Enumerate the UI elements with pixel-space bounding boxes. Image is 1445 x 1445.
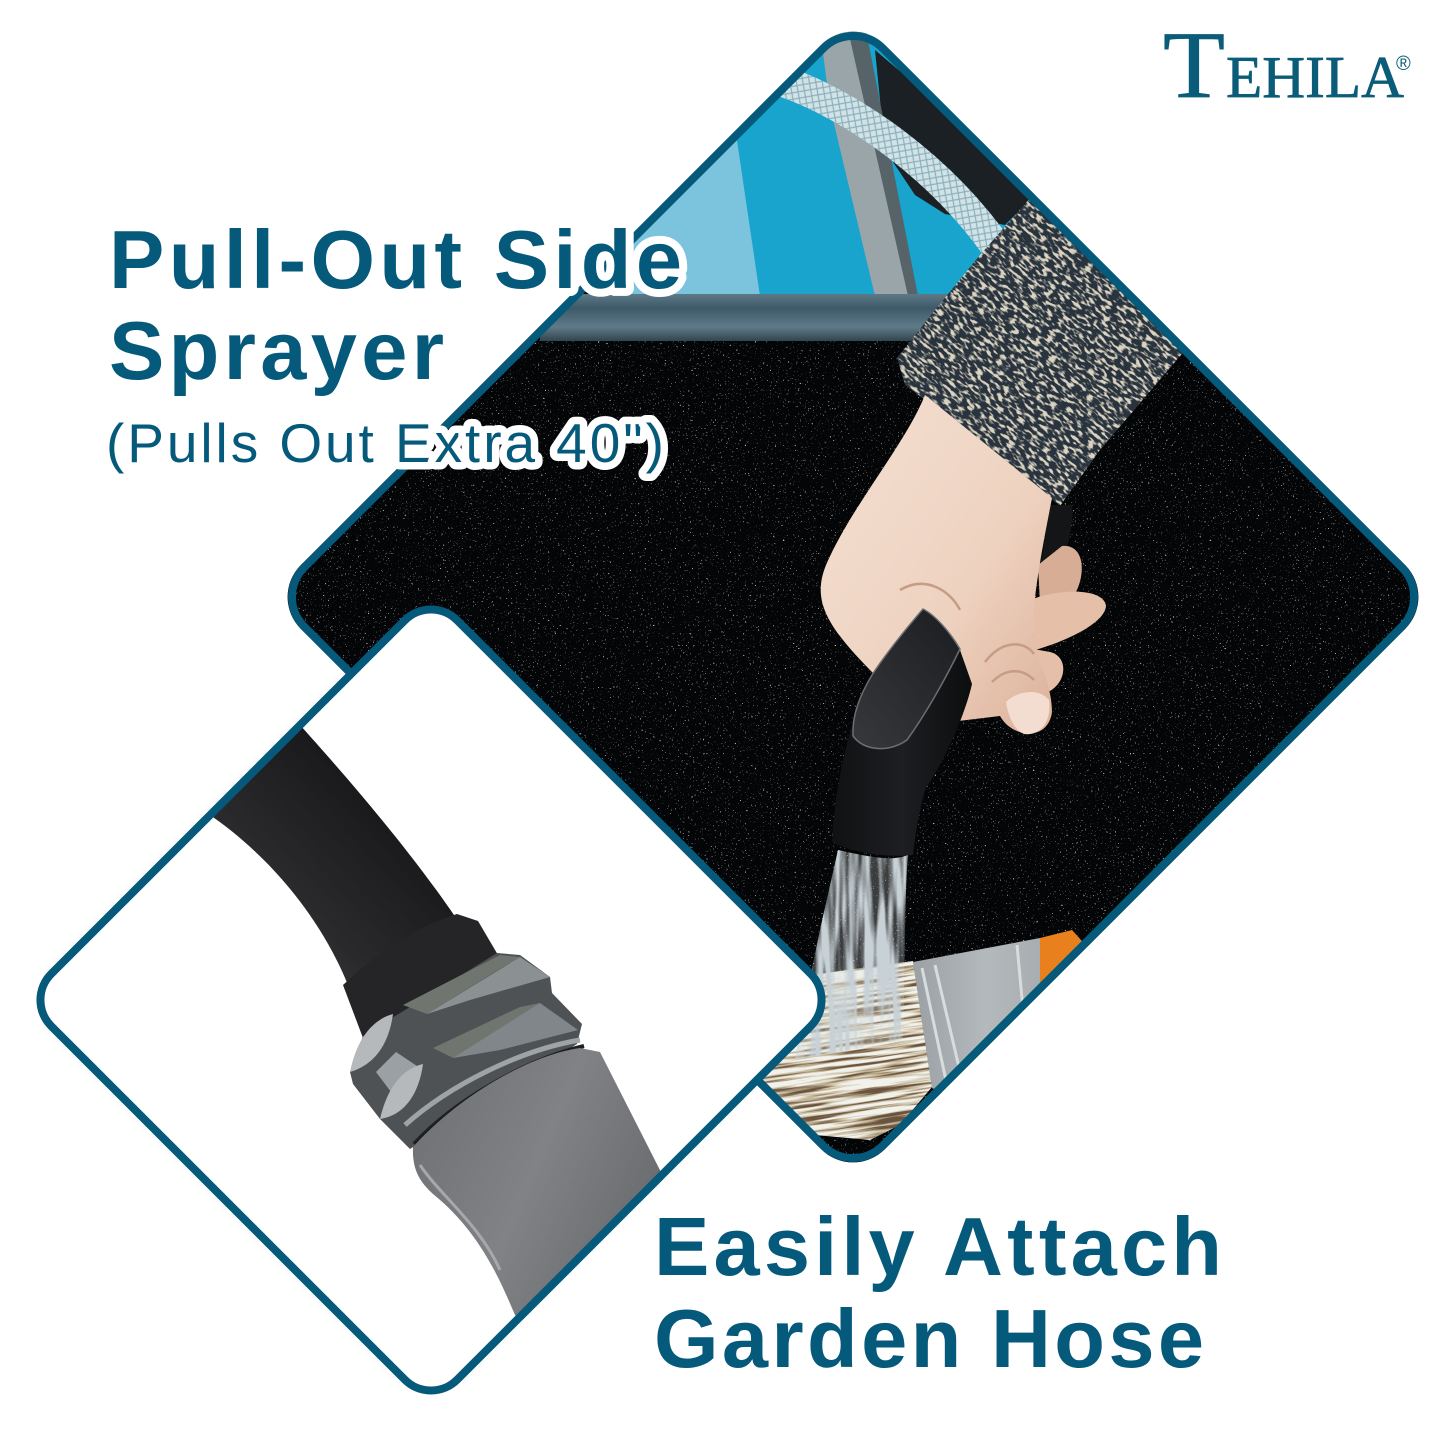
heading: pull-out side sprayer: Pull-Out Side <box>109 213 682 306</box>
hex facet lower <box>380 1064 423 1119</box>
silver ring <box>405 1040 580 1125</box>
sprayer handle panel <box>853 609 960 749</box>
lower nut facet <box>433 1003 540 1058</box>
subheading: pulls out extra 40 inches: (Pulls Out Extra 40") <box>106 412 664 474</box>
braided hose <box>785 82 1000 252</box>
dark patterned panel <box>875 50 1040 225</box>
paint brush bristles <box>762 961 932 1140</box>
thumb nail <box>1006 692 1049 734</box>
fingers <box>1028 546 1106 694</box>
panel: sprayer photo diamond <box>260 19 1440 1187</box>
upper nut facet <box>403 955 520 1014</box>
ferrule ridges <box>922 945 1024 1090</box>
brush ferrule <box>913 938 1060 1100</box>
logo: Tehila <box>1163 12 1411 118</box>
hand <box>821 395 1052 734</box>
sprayer diamond border <box>275 19 1431 1175</box>
hose diamond border <box>25 594 837 1406</box>
black hose <box>210 725 456 990</box>
adapter highlight <box>420 1165 500 1270</box>
black collar <box>343 914 498 1038</box>
sink ledge <box>540 294 960 341</box>
logo: Tehila: ® <box>1396 53 1411 75</box>
black gasket <box>414 1046 584 1144</box>
grey vertical post <box>820 30 912 296</box>
heading: easily attach garden hose: Garden Hose <box>654 1292 1204 1385</box>
sink speckles <box>260 340 1440 1180</box>
heading: easily attach garden hose <box>654 1200 1222 1385</box>
hex nut <box>350 953 582 1149</box>
logo: Tehila: EHILA <box>1226 44 1404 110</box>
handle cord behind hand <box>1042 505 1072 562</box>
photo background: black sink <box>260 290 1440 1180</box>
panel: garden hose attachment diamond <box>25 594 837 1406</box>
sprayer head body <box>832 650 972 856</box>
blue wall <box>600 20 1160 296</box>
post dark groove <box>848 30 918 296</box>
heading: pull-out side sprayer <box>109 213 682 397</box>
grey hose adapter <box>413 1048 665 1340</box>
logo: Tehila: T <box>1163 12 1225 118</box>
water stream <box>795 850 908 1060</box>
heading: pull-out side sprayer: Sprayer <box>109 304 444 397</box>
light blue panel <box>631 140 760 294</box>
small diamond background <box>25 594 837 1406</box>
lower silver stripe <box>453 1003 578 1058</box>
heading: easily attach garden hose: Easily Attach <box>654 1200 1222 1293</box>
hex facet left <box>350 1014 393 1072</box>
upper silver stripe <box>427 957 550 1014</box>
silver cylinder between facets <box>376 1052 417 1091</box>
brush orange handle <box>1040 930 1087 983</box>
knuckle crease <box>900 584 1034 682</box>
knit sleeve <box>897 200 1182 505</box>
